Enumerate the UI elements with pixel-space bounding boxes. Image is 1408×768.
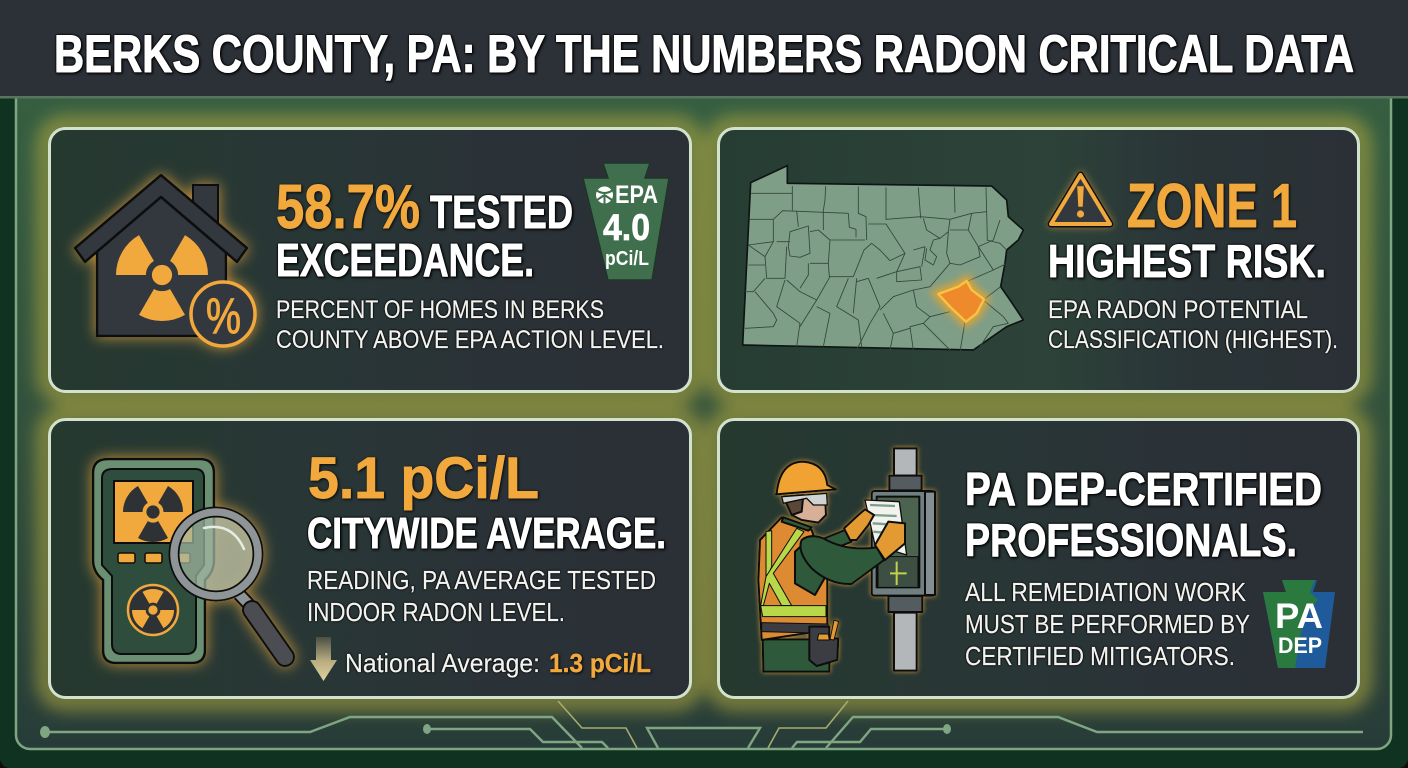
- icon: EPA keystone badge: EPA: [615, 181, 658, 209]
- panel: citywide average: [50, 420, 690, 698]
- stat heading: TESTED: [430, 186, 573, 238]
- icon: warning triangle: [1051, 175, 1110, 224]
- national average comparison: 1.3 pCi/L: [549, 648, 651, 678]
- icon: radon detector with magnifier: [93, 459, 285, 663]
- magnifier: [174, 512, 285, 657]
- stat heading: 5.1 pCi/L: [308, 446, 539, 511]
- stat heading: 58.7%: [276, 173, 420, 242]
- stat heading: [276, 173, 573, 286]
- icon: PA DEP keystone badge: PA: [1275, 597, 1323, 636]
- header bar: [0, 0, 1408, 98]
- icon: EPA keystone badge: pCi/L: [605, 248, 649, 270]
- panel: certified professionals: [718, 420, 1358, 698]
- stat heading: CITYWIDE AVERAGE.: [307, 509, 666, 558]
- description: EPA RADON POTENTIAL: [1048, 296, 1308, 324]
- national average comparison: National Average:: [345, 648, 540, 678]
- icon: percent badge: [191, 282, 255, 346]
- description: CERTIFIED MITIGATORS.: [965, 641, 1235, 671]
- stat heading: [1048, 172, 1326, 287]
- highlighted Berks County: [938, 281, 984, 322]
- stat heading: PA DEP-CERTIFIED: [965, 463, 1322, 515]
- stat heading: HIGHEST RISK.: [1048, 235, 1326, 287]
- icon: EPA keystone badge: 4.0: [603, 207, 650, 248]
- description: INDOOR RADON LEVEL.: [307, 597, 565, 627]
- stat heading: EXCEEDANCE.: [276, 234, 534, 286]
- description: CLASSIFICATION (HIGHEST).: [1048, 326, 1338, 354]
- description: [276, 296, 664, 354]
- description: [1048, 296, 1338, 354]
- panel: tested exceedance: [50, 128, 690, 392]
- stat heading: [965, 463, 1322, 566]
- stat heading: PROFESSIONALS.: [965, 514, 1297, 566]
- icon: PA DEP keystone badge: [1263, 580, 1335, 668]
- icon: worker at radon system: [758, 448, 935, 672]
- national average comparison: [345, 648, 651, 678]
- panel: zone 1: [718, 128, 1358, 392]
- stat heading: ZONE 1: [1127, 172, 1297, 241]
- description: ALL REMEDIATION WORK: [965, 577, 1247, 607]
- icon: percent badge: %: [206, 288, 241, 344]
- icon: house with radiation symbol: [75, 175, 255, 346]
- description: MUST BE PERFORMED BY: [965, 609, 1250, 639]
- description: PERCENT OF HOMES IN BERKS: [276, 296, 604, 324]
- description: [965, 577, 1250, 671]
- map: Pennsylvania counties: [743, 166, 1023, 352]
- icon: EPA keystone badge: [583, 163, 669, 280]
- description: [307, 565, 656, 627]
- panel glows: [46, 125, 1362, 701]
- stat heading: [307, 446, 666, 558]
- description: COUNTY ABOVE EPA ACTION LEVEL.: [276, 326, 664, 354]
- icon: PA DEP keystone badge: DEP: [1278, 633, 1322, 658]
- description: READING, PA AVERAGE TESTED: [307, 565, 656, 595]
- icon: down arrow: [310, 637, 337, 681]
- circuit traces: [40, 701, 1363, 748]
